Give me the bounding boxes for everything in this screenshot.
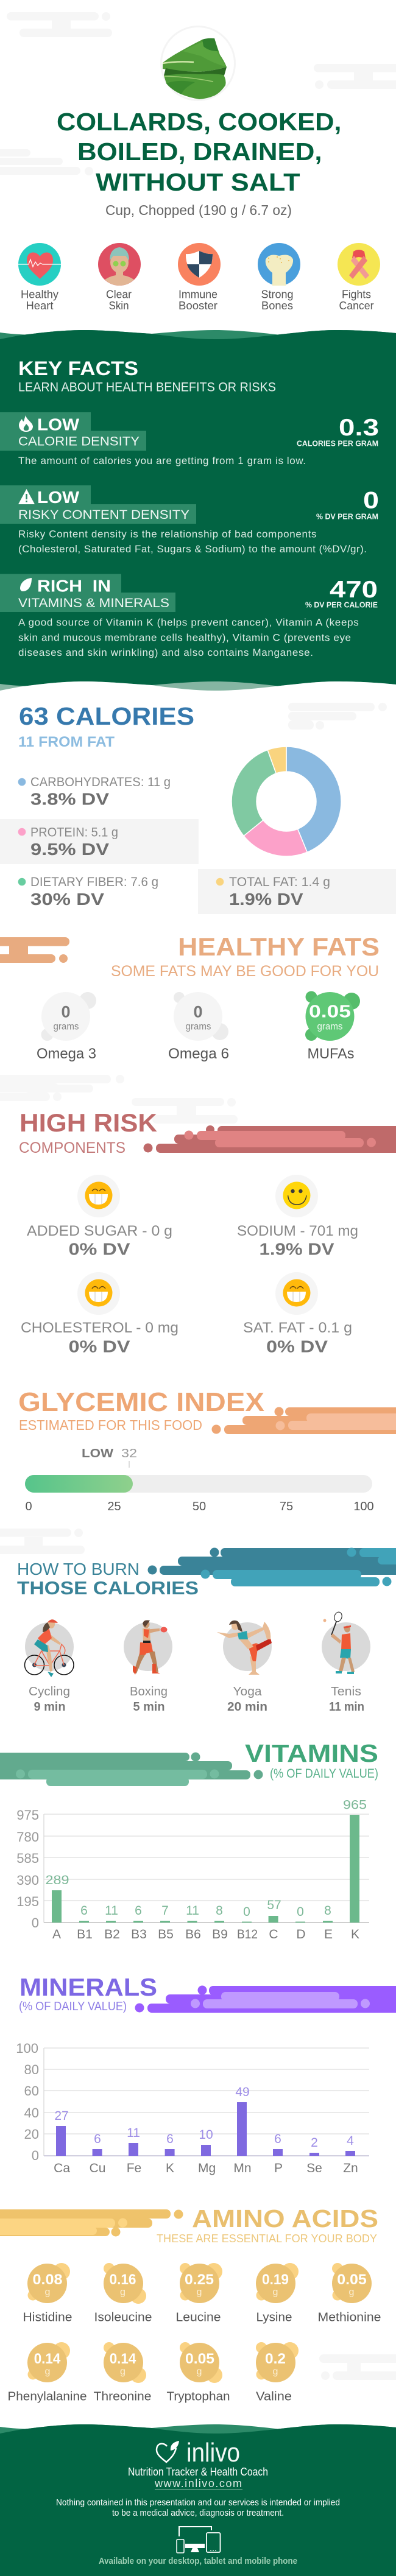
icon: healthy heart: [18, 243, 61, 312]
panel: how to burn those calories: [17, 1548, 396, 1714]
subheading: from fat: 11 FROM FAT: [18, 734, 115, 750]
amino: valine: Valine: [256, 2390, 292, 2404]
website link: www.inlivo.com: [154, 2477, 242, 2490]
disclaimer: Nothing contained in this presentation and our services is intended or implied: [56, 2497, 340, 2508]
bar chart: vitamins: B12: [237, 1927, 258, 1941]
heading: vitamins: VITAMINS: [245, 1739, 378, 1767]
fact: rich in vitamins and minerals: % DV PER CALORIE: [305, 600, 378, 610]
fat: omega 3: Omega 3: [37, 1046, 96, 1062]
bar chart: vitamins: B2: [104, 1927, 120, 1941]
icon: fights cancer: [338, 243, 380, 312]
amino: phenylalanine: [7, 2342, 87, 2404]
panel: footer: [0, 2424, 396, 2576]
bar chart: vitamins: K: [351, 1927, 359, 1941]
bar chart: minerals: 4: [347, 2134, 354, 2148]
bar chart: vitamins: B3: [131, 1927, 147, 1941]
glycemic value label: LOW: [82, 1447, 113, 1460]
legend: dietary fiber: 30% DV: [30, 890, 104, 909]
amino: leucine: Leucine: [175, 2311, 221, 2324]
bar chart: vitamins: 195: [16, 1894, 39, 1909]
benefit icons row: [18, 243, 380, 312]
amino: phenylalanine: g: [45, 2367, 50, 2377]
subheading: (% OF DAILY VALUE): [19, 1999, 127, 2013]
risk: sodium: [237, 1175, 358, 1259]
decorative cloud: purple: [135, 1985, 396, 2013]
bar chart: minerals: K: [166, 2161, 174, 2175]
fat: omega 3: grams: [54, 1022, 79, 1032]
icon: strong bones: Strong: [261, 289, 294, 301]
bar chart: minerals: Se: [306, 2161, 322, 2175]
title: [57, 108, 341, 196]
fat: omega 3: 0: [61, 1003, 71, 1021]
bar chart: vitamins: 8: [216, 1904, 223, 1918]
risk: sodium: SODIUM - 701 mg: [237, 1223, 358, 1239]
panel: amino acids: [0, 2205, 381, 2404]
bar chart: minerals: 40: [24, 2105, 39, 2120]
glycemic value label: 32: [121, 1447, 137, 1460]
legend: carbohydrates: 3.8% DV: [30, 790, 109, 809]
bar chart: vitamins: 6: [80, 1904, 88, 1918]
bar chart: vitamins: 8: [324, 1904, 331, 1918]
tagline: Nutrition Tracker & Health Coach: [128, 2465, 268, 2478]
decorative cloud: green: [0, 1753, 263, 1786]
fact: low calorie density: CALORIES PER GRAM: [297, 438, 378, 448]
brand name: inlivo: [186, 2438, 240, 2468]
legend: total fat: 1.9% DV: [229, 890, 303, 909]
bar chart: minerals: 0: [32, 2148, 39, 2163]
fact: low calorie density: The amount of calories you are getting from 1 gram is low.: [18, 455, 306, 466]
fact: low risky content density: LOW: [37, 488, 80, 507]
bar chart: minerals: 27: [54, 2109, 69, 2123]
bar chart: vitamins: 390: [16, 1873, 39, 1888]
icon: devices: [177, 2527, 221, 2553]
bar chart: vitamins: [16, 1798, 369, 1941]
heading: minerals: MINERALS: [19, 1973, 157, 2001]
food photo: collard leaves: [161, 27, 235, 100]
bar chart: vitamins: 7: [161, 1904, 169, 1918]
legend: total fat: [198, 869, 396, 914]
subheading: components: COMPONENTS: [19, 1139, 126, 1156]
bar chart: minerals: Mg: [198, 2161, 216, 2175]
bar chart: vitamins: B9: [212, 1927, 228, 1941]
amino: histidine: 0.08: [33, 2272, 62, 2288]
risk: cholesterol: CHOLESTEROL - 0 mg: [21, 1320, 179, 1336]
activity: tennis: Tenis: [331, 1685, 361, 1698]
disclaimer: [56, 2497, 340, 2518]
fat: omega 3: [37, 992, 96, 1062]
amino: tryptophan: g: [197, 2367, 202, 2377]
risk: sodium: 1.9% DV: [260, 1240, 334, 1259]
subheading: ESTIMATED FOR THIS FOOD: [19, 1417, 202, 1433]
bar chart: minerals: 60: [24, 2083, 39, 2099]
fact: low risky content density: Risky Content density is the relationship of bad components: [18, 528, 317, 540]
activity: tennis: 11 min: [329, 1700, 364, 1714]
fat: omega 6: 0: [193, 1003, 203, 1021]
risk: cholesterol: 0% DV: [68, 1337, 130, 1356]
amino: histidine: Histidine: [23, 2311, 72, 2324]
amino: methionine: [318, 2263, 381, 2324]
icon: immune booster: Booster: [179, 300, 217, 312]
activity: yoga: [217, 1621, 272, 1714]
risk: added sugar: [27, 1175, 172, 1259]
bar chart: vitamins: B6: [185, 1927, 201, 1941]
bar chart: vitamins: 11: [186, 1904, 199, 1918]
legend: carbohydrates: [18, 775, 171, 809]
legend: protein: PROTEIN: 5.1 g: [30, 825, 118, 839]
bar chart: vitamins: 780: [16, 1829, 39, 1845]
bar chart: minerals: 49: [235, 2085, 250, 2099]
amino: threonine: Threonine: [94, 2390, 151, 2404]
icon: strong bones: [258, 243, 300, 312]
fact: low risky content density: 0: [363, 488, 379, 514]
bar chart: minerals: 6: [94, 2132, 101, 2146]
subheading: THESE ARE ESSENTIAL FOR YOUR BODY: [157, 2232, 377, 2245]
panel: glycemic index: [18, 1387, 396, 1513]
activity: boxing: 5 min: [133, 1700, 164, 1714]
activity: tennis: [322, 1611, 370, 1714]
amino: lysine: 0.19: [262, 2272, 289, 2288]
fact: low calorie density: [0, 412, 379, 466]
icon: immune booster: [178, 243, 221, 312]
bar chart: minerals: Ca: [54, 2161, 70, 2175]
panel: key facts: [0, 330, 396, 694]
bar chart: vitamins: 11: [105, 1904, 118, 1918]
bar chart: vitamins: 0: [32, 1915, 39, 1930]
legend: carbohydrates: CARBOHYDRATES: 11 g: [30, 775, 171, 789]
amino: leucine: g: [197, 2287, 202, 2298]
amino: valine: [256, 2342, 299, 2404]
amino: threonine: [94, 2342, 151, 2404]
legend: dietary fiber: [18, 875, 158, 909]
amino: tryptophan: [167, 2342, 230, 2404]
disclaimer: to be a medical advice, diagnosis or treatment.: [112, 2508, 284, 2518]
panel: minerals: [16, 1973, 396, 2175]
heading: those calories: THOSE CALORIES: [17, 1577, 199, 1599]
amino: tryptophan: Tryptophan: [167, 2390, 230, 2404]
glycemic axis labels: 75: [280, 1500, 293, 1513]
fact: low calorie density: CALORIE DENSITY: [18, 434, 140, 449]
panel: healthy fats: [0, 932, 380, 1062]
risk: saturated fat: SAT. FAT - 0.1 g: [243, 1320, 352, 1336]
icon: strong bones: Bones: [261, 300, 293, 312]
fact: rich in vitamins and minerals: 470: [330, 577, 378, 603]
fact: low risky content density: RISKY CONTENT DENSITY: [18, 507, 189, 522]
panel: calories: [0, 702, 396, 914]
heading: amino acids: AMINO ACIDS: [192, 2205, 378, 2233]
fact: rich in vitamins and minerals: diseases and skin wrinkling) and also contains Manganese.: [18, 647, 313, 658]
amino: leucine: 0.25: [185, 2272, 214, 2288]
heading: glycemic index: GLYCEMIC INDEX: [18, 1387, 264, 1417]
risk: added sugar: ADDED SUGAR - 0 g: [27, 1223, 172, 1239]
activity: boxing: [124, 1620, 172, 1714]
icon: inlivo heart logo: [157, 2441, 179, 2462]
legend: protein: 9.5% DV: [30, 840, 109, 859]
icon: fights cancer: Cancer: [339, 300, 374, 312]
title: BOILED, DRAINED,: [77, 138, 322, 166]
bar chart: vitamins: B1: [77, 1927, 93, 1941]
bar chart: minerals: 6: [274, 2132, 281, 2146]
amino: threonine: 0.14: [110, 2351, 136, 2367]
amino: leucine: [175, 2263, 222, 2324]
icon: immune booster: Immune: [179, 289, 217, 301]
bar chart: minerals: Mn: [233, 2161, 252, 2175]
activity: cycling: 9 min: [34, 1700, 66, 1714]
bar chart: minerals: 80: [24, 2062, 39, 2077]
panel: vitamins: [0, 1739, 378, 1941]
bar chart: vitamins: 6: [135, 1904, 142, 1918]
title: COLLARDS, COOKED,: [57, 108, 341, 136]
subheading: SOME FATS MAY BE GOOD FOR YOU: [111, 963, 379, 980]
bar chart: vitamins: B5: [158, 1927, 174, 1941]
heading: calories: 63 CALORIES: [19, 702, 194, 730]
risk: saturated fat: [243, 1272, 352, 1356]
bar chart: minerals: Zn: [343, 2161, 358, 2175]
bar chart: vitamins: 0: [297, 1905, 304, 1919]
fat: MUFAs: [305, 991, 360, 1062]
amino: isoleucine: 0.16: [110, 2272, 136, 2288]
amino: lysine: Lysine: [256, 2311, 292, 2324]
icon: clear skin: Skin: [108, 300, 129, 312]
amino: threonine: g: [120, 2367, 126, 2377]
bar chart: minerals: 20: [24, 2127, 39, 2142]
amino: methionine: g: [349, 2287, 354, 2298]
amino: isoleucine: [94, 2263, 152, 2324]
amino: tryptophan: 0.05: [185, 2351, 214, 2367]
panel: high risk components: [19, 1108, 396, 1356]
fat: omega 6: Omega 6: [168, 1046, 229, 1062]
amino: valine: g: [273, 2367, 278, 2377]
risk: cholesterol: [21, 1272, 179, 1356]
legend: total fat: TOTAL FAT: 1.4 g: [229, 875, 330, 889]
donut chart: [232, 747, 341, 856]
legend: dietary fiber: DIETARY FIBER: 7.6 g: [30, 875, 158, 889]
bar chart: minerals: P: [274, 2161, 283, 2175]
amino: histidine: g: [45, 2287, 50, 2298]
fact: rich in vitamins and minerals: [0, 574, 378, 658]
fact: rich in vitamins and minerals: RICH IN: [37, 577, 111, 596]
fat: MUFAs: 0.05: [309, 1002, 351, 1022]
fact: low risky content density: (Cholesterol, Saturated Fat, Sugars & Sodium) to the amount (%DV/gr).: [18, 543, 367, 555]
bar chart: vitamins: E: [324, 1927, 333, 1941]
bar chart: vitamins: 289: [45, 1873, 69, 1887]
icon: healthy heart: Healthy: [21, 289, 58, 301]
bar chart: vitamins: 57: [267, 1898, 281, 1912]
amino: isoleucine: g: [120, 2287, 126, 2298]
fact: low calorie density: LOW: [37, 415, 80, 434]
decorative cloud: orange: [212, 1407, 396, 1434]
glycemic progress bar: [25, 1475, 372, 1493]
decorative cloud: red: [144, 1125, 396, 1153]
bar chart: vitamins: 965: [343, 1798, 367, 1812]
glycemic value label: [82, 1447, 137, 1468]
heading: key facts: KEY FACTS: [18, 357, 138, 379]
amino: phenylalanine: 0.14: [34, 2351, 61, 2367]
bar chart: vitamins: 0: [243, 1905, 250, 1919]
decorative cloud: peach: [0, 937, 69, 963]
bar chart: minerals: 11: [127, 2126, 140, 2140]
heading: high risk: HIGH RISK: [19, 1108, 157, 1137]
decorative cloud: yellow: [0, 2209, 183, 2236]
activity: cycling: [24, 1619, 74, 1714]
amino: methionine: 0.05: [337, 2272, 367, 2288]
fact: low risky content density: % DV PER GRAM: [316, 512, 378, 521]
amino: phenylalanine: Phenylalanine: [7, 2390, 87, 2404]
risk: saturated fat: 0% DV: [266, 1337, 328, 1356]
heading: how to burn: HOW TO BURN: [17, 1560, 140, 1578]
fat: omega 6: grams: [185, 1022, 211, 1032]
fat: MUFAs: MUFAs: [307, 1046, 355, 1062]
fact: rich in vitamins and minerals: skin and mucous membrane cells healthy), Vitamin C (prevents eye: [18, 632, 351, 643]
bar chart: vitamins: 585: [16, 1851, 39, 1866]
heading: healthy fats: HEALTHY FATS: [178, 932, 380, 961]
fact: low risky content density: [0, 485, 379, 555]
subheading: LEARN ABOUT HEALTH BENEFITS OR RISKS: [18, 380, 276, 395]
fact: rich in vitamins and minerals: VITAMINS & MINERALS: [18, 596, 169, 610]
bar chart: vitamins: D: [296, 1927, 306, 1941]
icon: fights cancer: Fights: [342, 289, 371, 301]
bar chart: minerals: Cu: [90, 2161, 105, 2175]
amino: isoleucine: Isoleucine: [94, 2311, 152, 2324]
bar chart: minerals: 6: [166, 2132, 174, 2146]
decorative cloud: teal: [147, 1548, 396, 1586]
activity: yoga: Yoga: [233, 1685, 262, 1698]
activity: boxing: Boxing: [130, 1685, 168, 1698]
bar chart: minerals: 100: [16, 2041, 38, 2056]
bar chart: vitamins: A: [52, 1927, 61, 1941]
bar chart: minerals: Fe: [127, 2161, 141, 2175]
bar chart: vitamins: 975: [16, 1807, 39, 1823]
amino: lysine: [256, 2263, 299, 2324]
bar chart: minerals: 10: [199, 2128, 213, 2142]
activity: cycling: Cycling: [29, 1685, 70, 1698]
fat: omega 6: [168, 992, 229, 1062]
bar chart: minerals: 2: [311, 2136, 318, 2150]
glycemic axis labels: 25: [107, 1500, 121, 1513]
legend: protein: [0, 819, 199, 864]
bar chart: minerals: [16, 2041, 369, 2175]
fact: rich in vitamins and minerals: A good source of Vitamin K (helps prevent cancer), Vitamin A (keeps: [18, 616, 359, 628]
icon: clear skin: [98, 243, 141, 312]
amino: methionine: Methionine: [318, 2311, 381, 2324]
serving size subtitle: Cup, Chopped (190 g / 6.7 oz): [105, 202, 292, 218]
amino: lysine: g: [273, 2287, 278, 2298]
title: WITHOUT SALT: [96, 168, 300, 196]
amino: valine: 0.2: [265, 2351, 286, 2367]
risk: added sugar: 0% DV: [68, 1240, 130, 1259]
fact: low calorie density: 0.3: [339, 415, 379, 441]
glycemic axis labels: [25, 1500, 374, 1513]
availability note: Available on your desktop, tablet and mobile phone: [99, 2557, 297, 2566]
icon: healthy heart: Heart: [26, 300, 54, 312]
amino: histidine: [23, 2263, 72, 2324]
glycemic axis labels: 50: [193, 1500, 206, 1513]
icon: clear skin: Clear: [106, 289, 132, 301]
subheading: (% OF DAILY VALUE): [270, 1767, 378, 1781]
glycemic axis labels: 100: [353, 1500, 374, 1513]
bar chart: vitamins: C: [269, 1927, 278, 1941]
fat: MUFAs: grams: [317, 1022, 343, 1032]
glycemic axis labels: 0: [25, 1500, 32, 1513]
activity: yoga: 20 min: [227, 1700, 267, 1714]
